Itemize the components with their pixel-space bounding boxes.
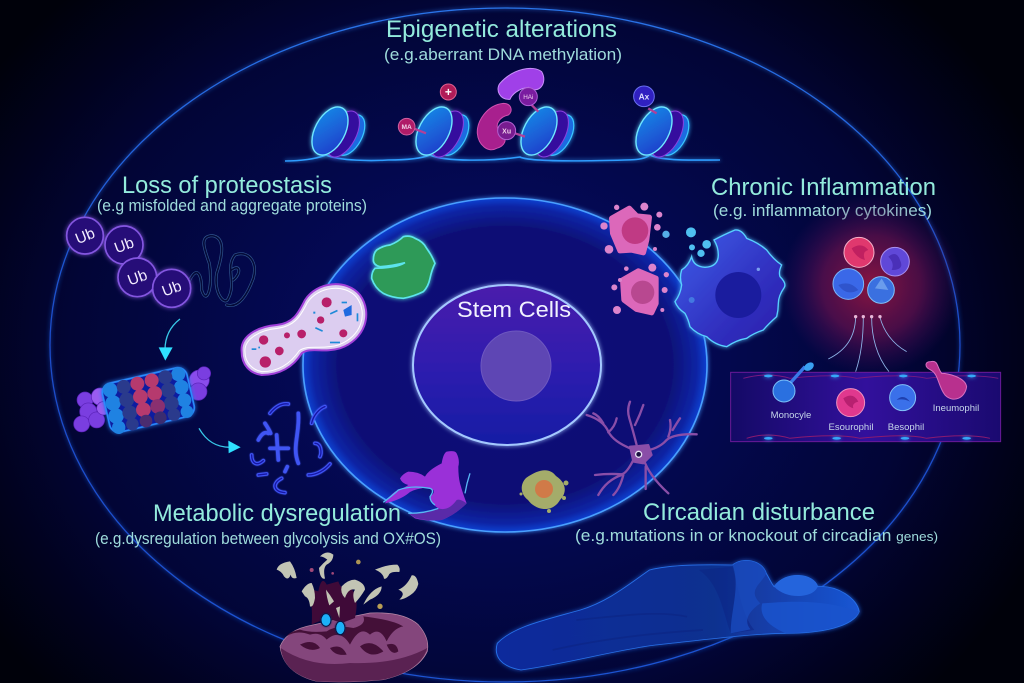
icon: apoptotic cell xyxy=(520,470,568,513)
cell membrane xyxy=(303,198,707,532)
panel: proteostasis illustrations: Ub xyxy=(125,267,150,289)
eosinophil xyxy=(837,389,865,417)
heading: metabolic dysregulation xyxy=(95,500,441,548)
misfolded protein chain xyxy=(188,236,255,306)
panel: stem cell xyxy=(303,198,707,532)
nucleolus xyxy=(481,331,551,401)
icon: green organelle xyxy=(372,236,435,298)
nucleosome 4 xyxy=(629,101,695,162)
ubiquitin chain xyxy=(67,217,191,307)
DNA strand xyxy=(285,155,720,161)
icon: damaged mitochondrion xyxy=(277,553,428,682)
pink enzyme xyxy=(477,103,511,150)
panel: inflammation illustrations xyxy=(600,195,1001,442)
heading: epigenetic alterations: (e.g.aberrant DNA methylation) xyxy=(384,46,622,64)
heading: metabolic dysregulation: Metabolic dysregulation xyxy=(153,500,401,527)
vesicle xyxy=(242,284,366,375)
stem cell nucleus xyxy=(413,285,601,445)
protein fragments xyxy=(252,404,330,493)
marks xyxy=(398,68,657,150)
violet enzyme xyxy=(498,68,544,99)
aggregate cylinder xyxy=(74,365,211,436)
heading: loss of proteostasis xyxy=(97,172,367,215)
heading: loss of proteostasis: Loss of proteostasis xyxy=(122,172,332,199)
marks: Ax xyxy=(639,91,650,101)
panel: proteostasis illustrations: Ub xyxy=(73,225,98,248)
signal lines xyxy=(828,315,907,372)
leukocyte cluster xyxy=(833,237,909,303)
pink cytokine cell 2 xyxy=(611,264,669,314)
vessel cell labels: Besophil xyxy=(888,422,924,433)
vessel cell labels: Ineumophil xyxy=(933,403,979,414)
vessel cell labels xyxy=(771,403,979,433)
panel: nucleosomes on DNA xyxy=(285,68,720,162)
monocyte xyxy=(790,367,805,383)
blue sparks xyxy=(321,614,345,635)
label: stem cells: Stem Cells xyxy=(457,297,571,322)
heading: chronic inflammation: Chronic Inflammation xyxy=(711,174,936,201)
mitochondrion body xyxy=(280,613,428,682)
burst debris xyxy=(307,581,357,625)
panel: proteostasis illustrations xyxy=(67,217,366,493)
icon: purple cell fragment xyxy=(383,451,470,521)
icon: neuron xyxy=(587,402,697,495)
marks: + xyxy=(445,85,452,99)
panel: proteostasis illustrations: Ub xyxy=(112,234,136,257)
heading: chronic inflammation: (e.g. inflammatory cytokines) xyxy=(713,202,932,220)
heading: circadian disturbance: CIrcadian disturbance xyxy=(643,499,875,526)
heading: epigenetic alterations: Epigenetic alterations xyxy=(386,16,617,43)
arrow to fragments xyxy=(199,428,241,453)
nucleosome 3 xyxy=(514,101,580,162)
icon: sleeping figure xyxy=(496,560,859,670)
heading: loss of proteostasis: (e.g misfolded and aggregate proteins) xyxy=(97,197,367,215)
pink cytokine cell 1 xyxy=(600,203,670,254)
heading: circadian disturbance xyxy=(575,499,938,545)
neutrophil xyxy=(926,361,967,399)
arrow to proteasome xyxy=(159,319,180,361)
heading: chronic inflammation xyxy=(711,174,936,220)
heading: epigenetic alterations xyxy=(384,16,622,64)
panel: proteostasis illustrations: Ub xyxy=(160,278,184,300)
nucleosome 2 xyxy=(409,101,475,162)
red glow xyxy=(782,195,962,375)
macrophage xyxy=(675,227,785,347)
marks: MA xyxy=(401,124,412,131)
heading: circadian disturbance: (e.g.mutations in or knockout of circadian genes) xyxy=(575,527,938,545)
vessel cell labels: Monocyle xyxy=(771,410,811,421)
marks: HAi xyxy=(523,94,533,101)
blood vessel xyxy=(731,361,1001,442)
basophil xyxy=(890,385,916,411)
nucleosome 1 xyxy=(305,101,371,162)
heading: metabolic dysregulation: (e.g.dysregulation between glycolysis and OX#OS) xyxy=(95,530,441,548)
marks: Xu xyxy=(502,128,511,135)
vessel cell labels: Esourophil xyxy=(829,422,873,433)
